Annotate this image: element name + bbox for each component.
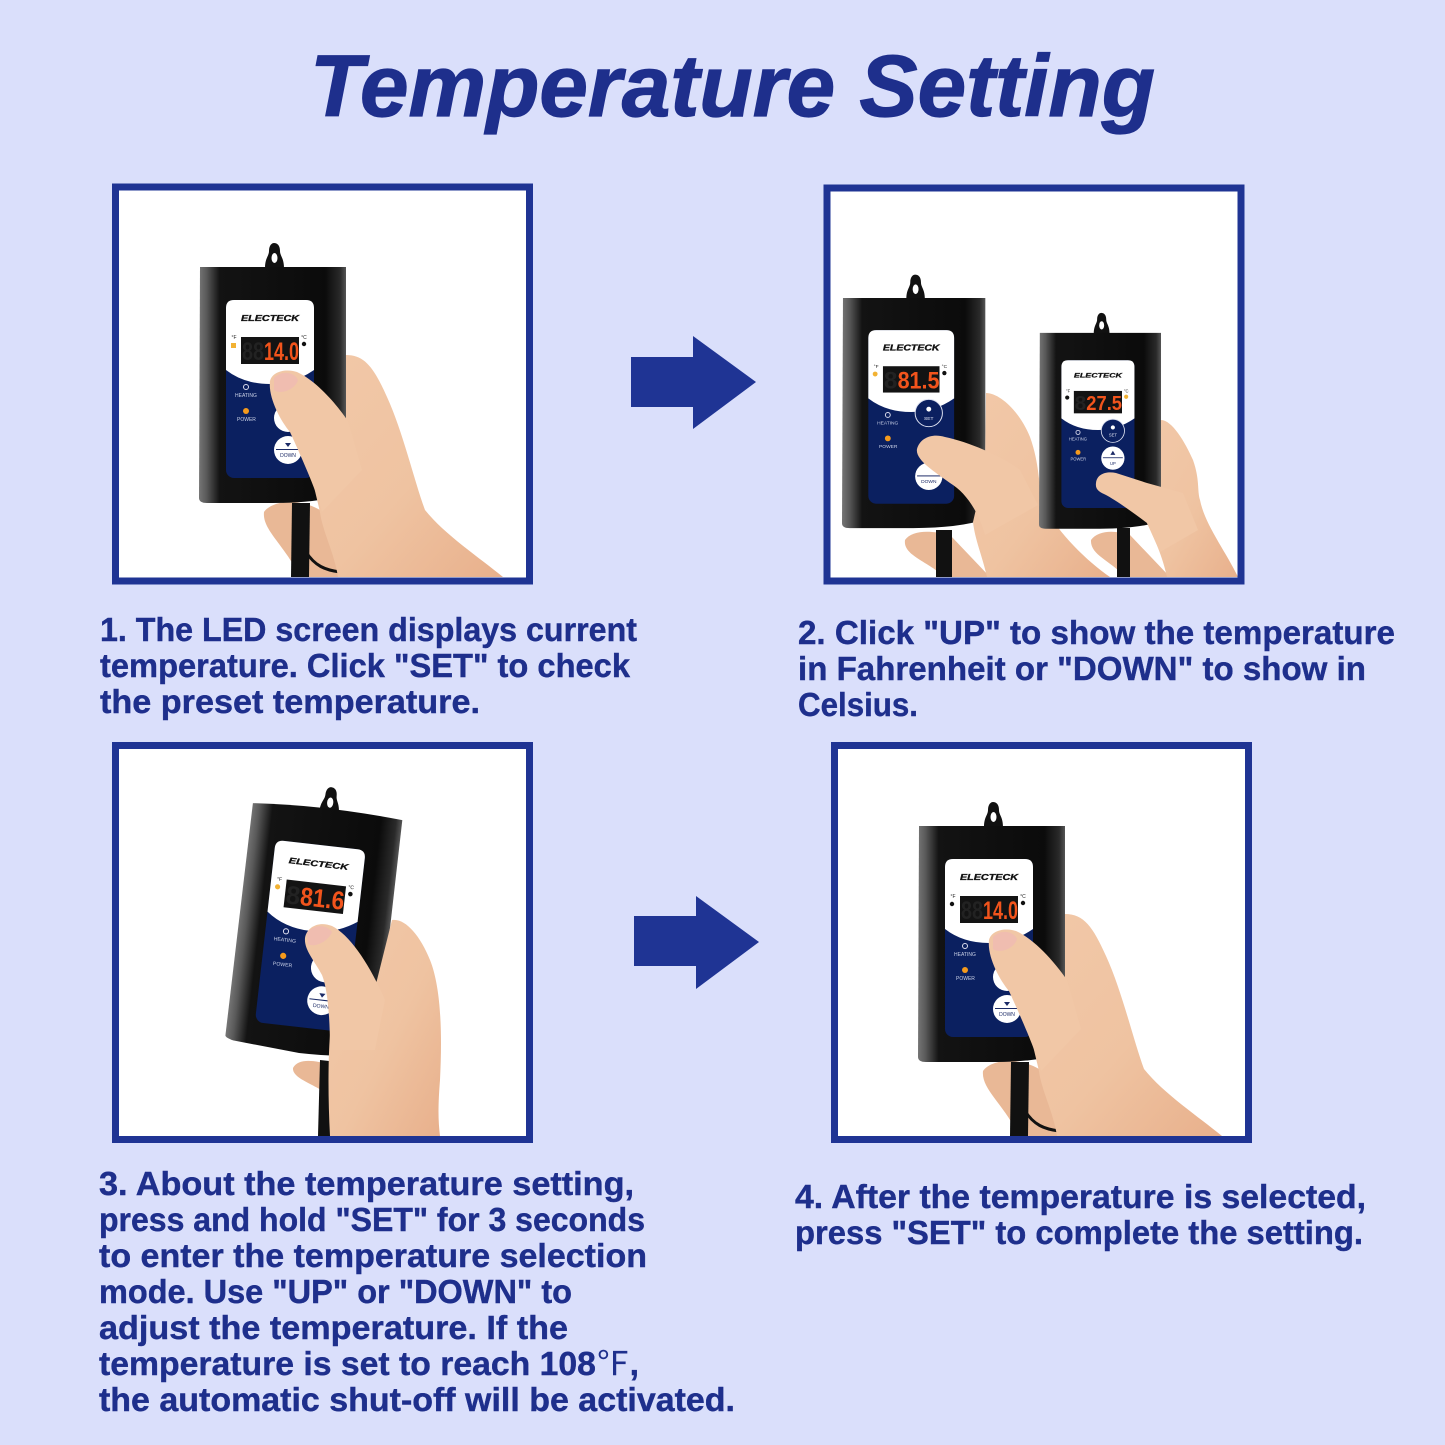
- hand on Fahrenheit device: [917, 393, 1110, 577]
- device: Celsius: ELECTECK: [1074, 373, 1124, 380]
- step 2 text: [798, 614, 1395, 723]
- device: 88: [961, 897, 983, 925]
- step 1 text: 1. The LED screen displays current: [100, 611, 637, 648]
- hand: [270, 355, 503, 577]
- frame: [116, 187, 530, 581]
- step 4 text: [795, 1178, 1366, 1251]
- step 3 text: [99, 1165, 735, 1418]
- device: °C: [1020, 894, 1026, 900]
- panel 1: current temperature photo: [116, 187, 530, 581]
- device: Celsius: UP: [1110, 461, 1116, 466]
- step 4 text: press "SET" to complete the setting.: [795, 1214, 1363, 1251]
- step 2 text: Celsius.: [798, 686, 918, 723]
- step 3 text: press and hold "SET" for 3 seconds: [99, 1201, 645, 1238]
- device: °F: [231, 335, 237, 341]
- frame: [834, 746, 1248, 1140]
- device: 8: [284, 881, 302, 911]
- device: °C: [301, 335, 307, 341]
- title: Temperature Setting: [310, 38, 1155, 135]
- device: DOWN: [280, 453, 296, 459]
- device: Celsius: HEATING: [1069, 437, 1087, 442]
- device: °C: [348, 885, 355, 891]
- panel 4: complete setting photo: [834, 746, 1248, 1140]
- step 4 text: 4. After the temperature is selected,: [795, 1178, 1366, 1215]
- device: Fahrenheit: 81.5: [898, 368, 939, 395]
- device: Celsius: 27.5: [1086, 392, 1122, 415]
- finger and cable behind device: [983, 1061, 1059, 1136]
- finger and cable behind device: [293, 1060, 338, 1136]
- device: Fahrenheit: DOWN: [921, 479, 937, 485]
- step 1 text: the preset temperature.: [100, 683, 480, 720]
- arrow 2: [634, 896, 759, 989]
- frame: [116, 746, 530, 1140]
- device: [199, 243, 346, 503]
- step 3 text: mode. Use "UP" or "DOWN" to: [99, 1273, 572, 1310]
- device: Celsius: °F: [1066, 389, 1071, 394]
- device: Celsius: SET: [1109, 433, 1117, 438]
- panel 3: temperature selection photo: [116, 746, 530, 1140]
- device: Fahrenheit: [842, 275, 985, 528]
- device: Fahrenheit: POWER: [879, 444, 898, 450]
- step 1 text: [100, 611, 637, 720]
- device: Celsius: 8: [1075, 392, 1086, 415]
- device: [918, 802, 1065, 1062]
- device: POWER: [273, 961, 293, 969]
- device: Fahrenheit: SET: [924, 416, 934, 422]
- device: Celsius: °C: [1124, 389, 1128, 394]
- device: 14.0: [264, 338, 299, 366]
- step 3 text: 3. About the temperature setting,: [99, 1165, 634, 1202]
- device: DOWN: [313, 1003, 330, 1011]
- device: °F: [277, 877, 282, 883]
- hand: [989, 914, 1222, 1136]
- device: HEATING: [235, 393, 257, 399]
- step 2 text: in Fahrenheit or "DOWN" to show in: [798, 650, 1366, 687]
- device: Fahrenheit: 8: [884, 368, 898, 395]
- step 3 text: the automatic shut-off will be activated.: [99, 1381, 735, 1418]
- hand: [305, 920, 441, 1136]
- device: POWER: [956, 976, 975, 982]
- device: Celsius: POWER: [1071, 457, 1086, 462]
- step 3 text: to enter the temperature selection: [99, 1237, 647, 1274]
- device: POWER: [237, 417, 256, 423]
- step 1 text: temperature. Click "SET" to check: [100, 647, 631, 684]
- device: 14.0: [983, 897, 1018, 925]
- device: °F: [950, 894, 956, 900]
- device: 88: [242, 338, 264, 366]
- device: Fahrenheit: °F: [874, 364, 879, 370]
- step 3 text: temperature is set to reach 108 ℉,: [99, 1337, 639, 1385]
- device: ELECTECK: [241, 314, 301, 323]
- step 3 text: adjust the temperature. If the: [99, 1309, 568, 1346]
- device: Fahrenheit: ELECTECK: [883, 344, 941, 353]
- device: Fahrenheit: °C: [942, 364, 948, 370]
- hand on Celsius device: [1096, 420, 1238, 577]
- device: 81.6: [299, 883, 346, 916]
- step 2 text: 2. Click "UP" to show the temperature: [798, 614, 1395, 651]
- device: DOWN: [999, 1012, 1015, 1018]
- fingers and cables behind devices: [905, 528, 1170, 577]
- frame: [827, 188, 1241, 581]
- device: [224, 778, 405, 1062]
- device: HEATING: [273, 936, 296, 945]
- device: ELECTECK: [960, 873, 1020, 882]
- panel 2: Fahrenheit and Celsius photo: [827, 188, 1241, 581]
- finger and cable behind device: [264, 502, 340, 577]
- device: Celsius: [1039, 313, 1161, 529]
- arrow 1: [631, 336, 756, 429]
- device: Fahrenheit: HEATING: [877, 421, 899, 427]
- device: HEATING: [954, 952, 976, 958]
- device: ELECTECK: [288, 856, 350, 872]
